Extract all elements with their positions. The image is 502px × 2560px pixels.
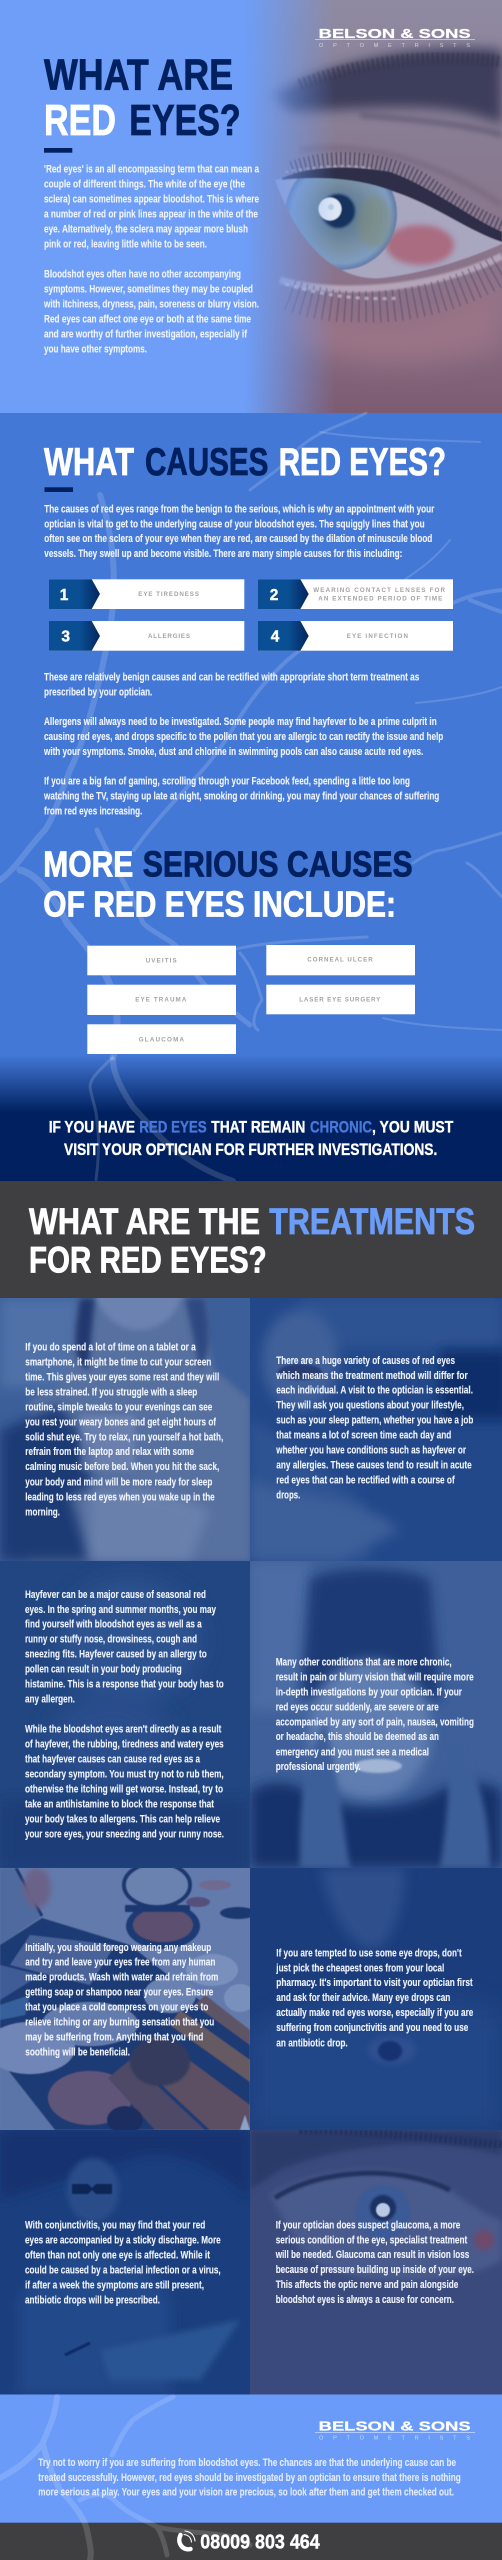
text block: what red eyes are: with itchiness, dryness, pain, soreness or blurry vision. [43,298,259,310]
heading: what are the treatments for red eyes?: WHAT ARE THE [29,1200,260,1242]
text block: hayfever: take an antihistamine to block the response that [25,1798,214,1810]
text block: screen time: time. This gives your eyes some rest and they will [25,1371,219,1383]
panel: treatments heading [0,1181,502,1298]
accent bar [44,487,73,492]
text block: conjunctivitis: eyes are accompanied by a sticky discharge. More [25,2235,221,2247]
text block: screen time: leading to less red eyes when you wake up in the [25,1491,215,1503]
text block: avoid makeup: that you place a cold compress on your eyes to [25,2002,209,2014]
text block: conjunctivitis: antibiotic drops will be prescribed. [25,2294,160,2306]
panel: treatment varies [250,1298,502,1561]
text block: hayfever: that hayfever causes can cause red eyes as a [25,1754,200,1766]
panel: eye drops [250,1868,502,2130]
panel: screen time treatment [0,1278,250,1561]
text block: range of causes [44,503,434,560]
callout: visit your optician: VISIT YOUR OPTICIAN FOR FURTHER INVESTIGATIONS. [64,1141,437,1159]
text block: hayfever: secondary symptom. You must try not to rub them, [25,1768,224,1780]
icon: telephone [179,2531,195,2549]
serious cause: laser eye surgery [266,985,415,1014]
title: What are red eyes?: EYES? [129,96,241,145]
photo: makeup palette and brushes [0,1863,256,2134]
logo: Belson & Sons [315,26,475,49]
text block: screen time: solid shut eye. Try to relax, run yourself a hot bath, [25,1431,223,1443]
heading: what causes red eyes? [44,441,446,484]
cause 3: allergies: 3 [61,629,70,646]
text block: eye drops: and ask for their advice. Many eye drops can [276,1992,450,2004]
accent bar [44,148,72,153]
panel: closing message [0,2394,502,2560]
text block: conjunctivitis: With conjunctivitis, you may find that your red [25,2220,205,2232]
text block: screen time: If you do spend a lot of time on a tablet or a [25,1342,196,1354]
text block: hayfever: runny or stuffy nose, drowsiness, cough and [25,1634,197,1646]
photo: woman in glasses on bed [250,1298,502,1561]
text block: what red eyes are [43,164,259,355]
text block: conjunctivitis: could be caused by a bacterial infection or a virus, [25,2264,221,2276]
text block: benign causes [43,671,444,818]
heading: more serious causes: MORE [43,844,133,885]
heading: what causes red eyes?: WHAT [44,441,134,484]
text block: glaucoma: bloodshot eyes is always a cause for concern. [276,2294,454,2306]
photo: person sneezing [0,1580,250,1870]
cause 4: eye infection: 4 [271,629,280,646]
text block: screen time: your body and mind will be more ready for sleep [25,1476,213,1488]
text block: eye drops: just pick the cheapest ones from your local [276,1962,444,1974]
text block: treatment varies [276,1355,474,1502]
text block: screen time: calming music before bed. When you hit the sack, [25,1461,219,1473]
panel: makeup advice [0,1863,256,2134]
text block: hayfever [25,1589,224,1840]
text block: what red eyes are: you have other symptoms. [44,343,147,355]
text block: chronic conditions: or headache, this should be deemed as an [276,1731,439,1743]
panel: hayfever [0,1561,250,1870]
text block: what red eyes are: Bloodshot eyes often have no other accompanying [44,268,241,280]
panel: causes of red eyes [0,413,502,1181]
text block: screen time: routine, simple tweaks to your evenings can see [25,1401,212,1413]
serious cause: glaucoma [87,1024,236,1054]
cause 3: allergies [49,621,244,651]
text block: avoid makeup: getting soap or shampoo near your eyes. Ensure [25,1987,213,1999]
cause 2: contact lenses: 2 [270,587,278,604]
heading: what causes red eyes?: CAUSES [145,441,268,484]
heading: what causes red eyes?: RED EYES? [279,441,446,484]
text block: what red eyes are: eye. Alternatively, the sclera may appear more blush [44,223,248,235]
text block: treatment varies: that means a lot of screen time each day and [276,1430,451,1442]
cause 4: eye infection: EYE INFECTION [347,633,409,640]
cause 1: eye tiredness: 1 [60,587,69,604]
text block: what red eyes are: and are worthy of further investigation, especially if [44,328,247,340]
callout: visit your optician: THAT REMAIN [211,1119,305,1137]
heading: more serious causes [43,844,413,925]
text block: what red eyes are: a number of red or pink lines appear in the white of the [44,208,258,220]
logo: Belson & Sons [315,2418,475,2442]
text block: avoid makeup: made products. Wash with water and refrain from [25,1971,218,1983]
cause 3: allergies: ALLERGIES [148,633,190,640]
text block: what red eyes are: couple of different things. The white of the eye (the [44,179,245,191]
text block: chronic conditions: professional urgently. [276,1761,361,1773]
text block: what red eyes are: Red eyes can affect one eye or both at the same time [44,313,251,325]
text block: hayfever: any allergen. [25,1694,75,1706]
logo: Belson & Sons: BELSON & SONS [319,26,471,41]
text block: hayfever: your sore eyes, your sneezing and your runny nose. [25,1828,224,1840]
text block: avoid makeup: Initially, you should forego wearing any makeup [25,1942,212,1954]
serious cause: uveitis [87,946,236,975]
text block: screen time: refrain from the laptop and relax with some [25,1446,194,1458]
text block: chronic conditions: Many other conditions that are more chronic, [276,1656,452,1668]
title: What are red eyes?: RED [44,96,116,145]
text block: screen time: morning. [25,1506,60,1518]
text block: chronic conditions: emergency and you must see a medical [276,1746,429,1758]
callout: visit your optician: RED EYES [139,1119,207,1137]
text block: conjunctivitis [25,2220,221,2306]
serious cause: laser eye surgery: LASER EYE SURGERY [299,997,381,1004]
logo: Belson & Sons: OPTOMETRISTS [319,43,470,49]
text block: avoid makeup: soothing will be beneficial. [25,2046,130,2058]
callout: visit your optician: , YOU MUST [372,1119,453,1137]
logo: Belson & Sons: BELSON & SONS [319,2418,471,2433]
text block: treatment varies: red eyes that can be rectified with a course of [276,1474,455,1486]
serious cause: corneal ulcer: CORNEAL ULCER [307,957,373,964]
text block: what red eyes are: pink or red, leaving little white to be seen. [44,238,207,250]
photo: woman holding her head [250,1561,502,1868]
cause 2: contact lenses: WEARING CONTACT LENSES FOR [313,587,446,594]
text block: eye drops: an antibiotic drop. [276,2037,348,2049]
text block: what red eyes are: symptoms. However, sometimes they may be coupled [44,283,253,295]
text block: hayfever: of hayfever, the rubbing, tiredness and watery eyes [25,1739,224,1751]
photo: eye close-up [250,2130,502,2281]
title: What are red eyes? [44,50,241,145]
text block: conjunctivitis: if after a week the symptoms are still present, [25,2279,204,2291]
photo: eye drops close-up [250,1868,502,2130]
text block: chronic conditions [276,1656,474,1773]
text block: avoid makeup: may be suffering from. Anything that you find [25,2032,203,2044]
text block: what red eyes are: 'Red eyes' is an all encompassing term that can mean a [44,164,259,176]
text block: closing advice [38,2457,461,2499]
text block: screen time: smartphone, it might be time to cut your screen [25,1357,211,1369]
callout: visit your optician [49,1119,453,1159]
text block: avoid makeup: and try and leave your eyes free from any human [25,1957,215,1969]
text block: treatment varies: drops. [276,1490,300,1502]
heading: more serious causes: SERIOUS CAUSES [143,844,413,885]
background blood vessels [0,413,502,1181]
text block: range of causes: vessels. They swell up and become visible. There are many simple causes for this including: [44,548,402,560]
cause 1: eye tiredness: EYE TIREDNESS [138,591,199,598]
heading: more serious causes: OF RED EYES INCLUDE: [43,884,396,925]
panel: glaucoma [250,2130,502,2394]
panel: conjunctivitis [0,2130,250,2394]
text block: hayfever: find yourself with bloodshot eyes as well as a [25,1618,202,1630]
text block: hayfever: otherwise the itching will get worse. Instead, try to [25,1783,223,1795]
photo: close-up of a red eye [230,0,502,413]
text block: hayfever: your body takes to allergens. This can help relieve [25,1813,220,1825]
heading: what are the treatments for red eyes?: FOR RED EYES? [29,1239,267,1281]
text block: screen time: be less strained. If you struggle with a sleep [25,1386,198,1398]
text block: glaucoma [275,2219,474,2306]
text block: hayfever: histamine. This is a response that your body has to [25,1679,224,1691]
title: What are red eyes?: WHAT ARE [44,50,233,100]
panel: introduction [0,0,502,413]
text block: avoid makeup [25,1942,218,2058]
text block: benign causes: prescribed by your optician. [44,686,152,698]
serious cause: eye trauma [87,985,236,1015]
text block: eye drops [276,1947,473,2049]
serious cause: glaucoma: GLAUCOMA [139,1036,185,1043]
text block: what red eyes are: sclera) can sometimes appear bloodshot. This is where [44,193,259,205]
cause 2: contact lenses [258,579,453,609]
callout: visit your optician: IF YOU HAVE [49,1119,135,1137]
cause 2: contact lenses: AN EXTENDED PERIOD OF TIME [318,595,442,602]
text block: screen time: you rest your weary bones and get eight hours of [25,1416,216,1428]
text block: hayfever: eyes. In the spring and summer months, you may [25,1604,216,1616]
serious cause: corneal ulcer [266,945,415,975]
text block: screen time [25,1342,223,1518]
heading: what are the treatments for red eyes? [29,1200,475,1281]
text block: hayfever: Hayfever can be a major cause of seasonal red [25,1589,206,1601]
text block: hayfever: sneezing fits. Hayfever caused by an allergy to [25,1649,207,1661]
phone number: 08009 803 464 [200,2532,320,2554]
serious cause: uveitis: UVEITIS [146,957,177,964]
photo: optician at desk [0,2130,250,2394]
background blood vessels [0,2397,250,2560]
cause 4: eye infection [258,621,453,651]
serious cause: eye trauma: EYE TRAUMA [135,997,187,1004]
text block: hayfever: pollen can result in your body producing [25,1664,182,1676]
cause 1: eye tiredness [49,579,244,609]
photo: woman with smartphone [0,1278,250,1561]
text block: benign causes: from red eyes increasing. [44,806,142,818]
logo: Belson & Sons: OPTOMETRISTS [319,2436,470,2442]
text block: hayfever: While the bloodshot eyes aren't directly as a result [25,1723,222,1735]
text block: avoid makeup: relieve itching or any burning sensation that you [25,2017,214,2029]
text block: treatment varies: There are a huge variety of causes of red eyes [276,1355,455,1367]
panel: chronic conditions [250,1561,502,1868]
text block: chronic conditions: red eyes occur suddenly, are severe or are [276,1701,439,1713]
callout: visit your optician: CHRONIC [310,1119,372,1137]
text block: conjunctivitis: often than not only one eye is affected. While it [25,2249,210,2261]
